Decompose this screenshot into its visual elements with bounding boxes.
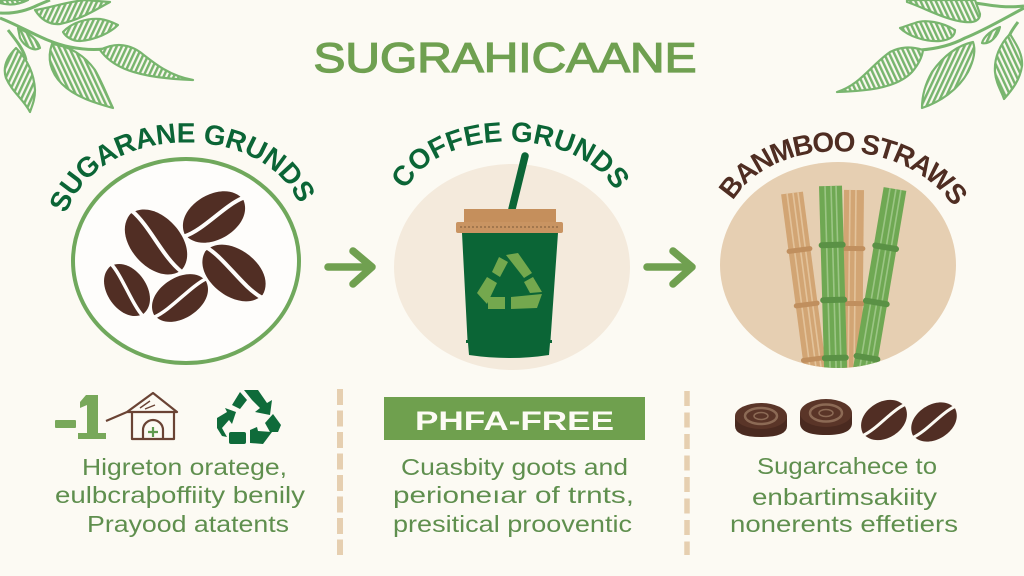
circle: bamboo background [720,162,956,368]
panel: coffee grunds [393,122,630,370]
panel: bamboo straws [718,132,966,368]
icon: minus one [55,395,106,439]
circle: beans background [73,159,299,363]
banner: phfa-free [384,397,645,440]
icon: house [106,393,177,439]
divider: left [337,389,343,555]
icon: sugarcane discs and beans [735,391,965,450]
banner: phfa-free: PHFA-FREE [415,406,614,436]
panel: sugarane grunds [50,123,314,365]
title: SUGRAHICAANE [314,34,696,81]
decoration: top-right leaves [837,0,1024,108]
heading: bamboo straws: BANMBOO STRAWS [718,132,966,204]
icon: recyclable cup [456,156,563,358]
heading: coffee grunds: COFFEE GRUNDS [393,122,628,188]
text block: left: eulbcraþoffiity benily [55,482,306,508]
icon: bamboo straws [781,186,906,368]
text block: middle: Cuasbity goots and [401,454,628,480]
divider: right [684,391,690,555]
text block: middle: perioneıar of trnts, [393,482,634,508]
text block: right: enbartimsakiity [752,484,938,510]
circle: cup background [394,164,630,370]
icon: coffee beans [94,180,278,332]
text block: right [730,453,958,537]
arrow: first [328,251,372,284]
text block: middle [393,454,634,537]
decoration: top-left leaves [0,0,193,112]
text block: middle: presitical prooventic [393,511,632,537]
heading: sugarane grunds: SUGARANE GRUNDS [50,123,314,211]
text block: left: Higreton oratege, [82,454,287,480]
arrow: second [647,251,692,284]
text block: left [55,454,306,537]
text block: right: nonerents effetiers [730,511,958,537]
text block: right: Sugarcahece to [757,453,937,479]
icon: recycle symbol [217,390,281,444]
text block: left: Prayood atatents [87,511,289,537]
